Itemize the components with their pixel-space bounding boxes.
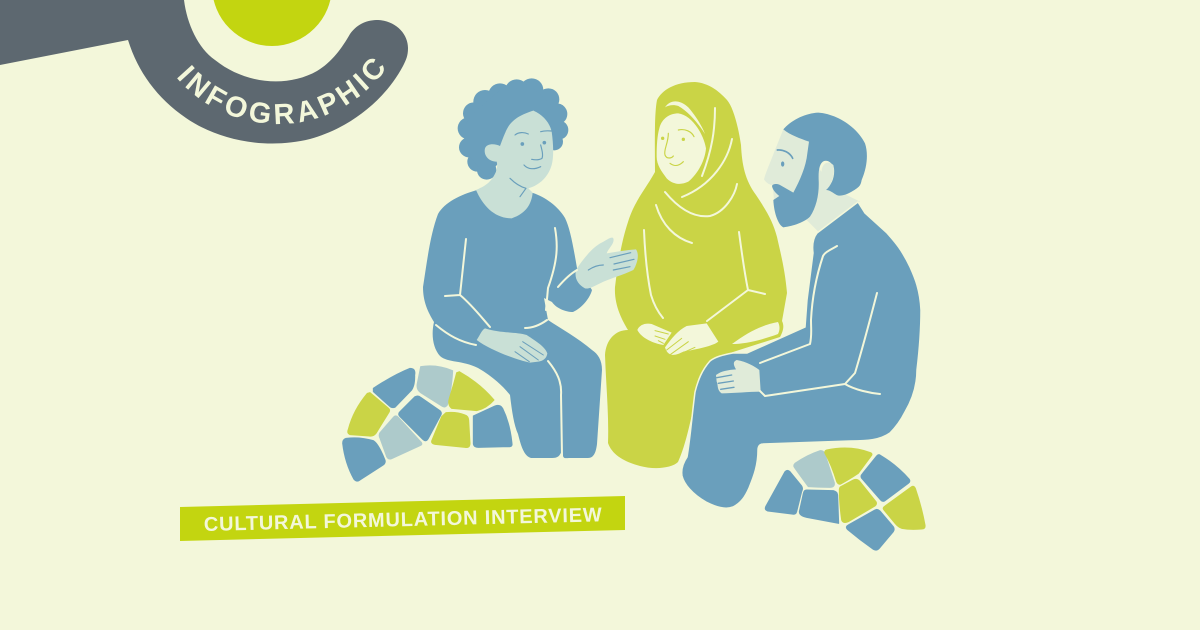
banner title: CULTURAL FORMULATION INTERVIEW xyxy=(204,504,602,536)
tiles: left stone cluster xyxy=(343,366,512,481)
banner strip xyxy=(180,496,625,541)
person: woman in headscarf xyxy=(605,82,787,468)
badge label: INFOGRAPHIC xyxy=(177,58,384,124)
person: bearded man xyxy=(682,113,921,508)
hair and beard xyxy=(772,113,867,227)
gesturing hand xyxy=(576,238,638,289)
hand on knee xyxy=(716,360,761,393)
badge: infographic corner tab xyxy=(0,0,408,144)
face and neck xyxy=(476,111,553,218)
lime circle xyxy=(212,0,332,46)
sleeve highlight xyxy=(732,322,780,344)
clothing fold lines xyxy=(436,228,577,456)
person: left woman with curly hair xyxy=(423,78,638,458)
tiles: right stone cluster xyxy=(765,448,925,550)
face details xyxy=(510,131,552,197)
scarf and sleeve fold lines xyxy=(644,108,765,321)
body and legs xyxy=(423,190,602,458)
face xyxy=(657,113,706,184)
dress and headscarf xyxy=(605,82,787,468)
jacket fold lines xyxy=(760,246,880,396)
ear xyxy=(822,163,834,189)
title banner xyxy=(180,496,625,541)
grey curved tab xyxy=(0,0,408,143)
neck and face xyxy=(764,129,860,233)
clasped hands xyxy=(637,323,718,355)
torso, arm and legs xyxy=(682,202,921,508)
curly hair xyxy=(458,78,568,180)
eye and brow xyxy=(777,150,793,167)
resting hand xyxy=(477,328,547,363)
face details and scarf highlight xyxy=(661,101,705,165)
